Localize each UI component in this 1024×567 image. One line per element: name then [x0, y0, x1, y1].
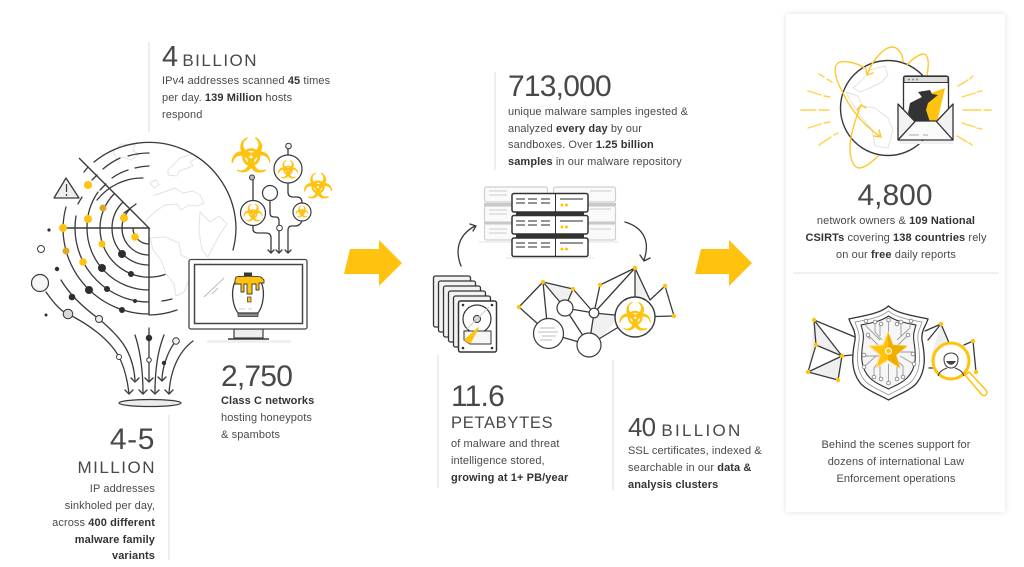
- stat: 11.6 petabytes: growing at 1+ PB/year: [451, 472, 569, 484]
- stat: 4,800 network owners: 4,800: [857, 179, 933, 212]
- text: law enforcement support: Behind the scenes support for: [821, 439, 971, 451]
- orbit arrows: [835, 47, 928, 168]
- stat: 40 billion SSL certificates: 40 BILLION: [628, 412, 743, 442]
- stat: 4 billion IPv4 addresses: [149, 41, 331, 132]
- stat: 40 billion SSL certificates: analysis clusters: [628, 479, 718, 491]
- icon: biohazard right: ☣: [303, 167, 333, 207]
- stat: 2,750 class C networks: 2,750: [221, 360, 292, 393]
- icon: magnifier with hacker: [933, 343, 987, 396]
- stat: 713,000 malware samples: unique malware samples ingested &: [508, 106, 689, 118]
- stat: 40 billion SSL certificates: SSL certificates, indexed &: [628, 445, 762, 457]
- stat: 11.6 petabytes: [438, 355, 569, 488]
- stat: 4 billion IPv4 addresses: 4 BILLION: [162, 41, 258, 73]
- stat: 4-5 million IP addresses: MILLION: [77, 458, 156, 477]
- envelope with logo window: [898, 76, 953, 144]
- arrow: first yellow arrow: [344, 240, 402, 286]
- stat: 11.6 petabytes: of malware and threat: [451, 438, 560, 450]
- illustration: biohazard network: ☣: [243, 201, 263, 227]
- shield: [849, 306, 928, 400]
- stat: 2,750 class C networks: & spambots: [221, 429, 280, 441]
- radar dots: [38, 181, 139, 316]
- icon: honey pot: [233, 272, 264, 316]
- stat: 713,000 malware samples: sandboxes. Over 1.25 billion: [508, 139, 654, 151]
- stat: 713,000 malware samples: samples in our malware repository: [508, 156, 682, 168]
- circuit lines: [862, 318, 916, 385]
- icon: biohazard large: ☣: [230, 129, 272, 184]
- arrow: servers to network: [625, 222, 650, 261]
- illustration: biohazard network: [230, 129, 333, 253]
- warning triangle icon: [54, 178, 79, 198]
- stat: 4,800 network owners: on our free daily reports: [836, 249, 956, 261]
- panel: outcomes card: [786, 14, 1005, 512]
- map on globe: [846, 66, 893, 148]
- stat: 4-5 million IP addresses: [52, 415, 169, 562]
- stat: 4-5 million IP addresses: 4-5: [110, 423, 155, 456]
- stat: 713,000 malware samples: 713,000: [508, 70, 611, 103]
- stat: 713,000 malware samples: [495, 70, 689, 170]
- stat: 4-5 million IP addresses: malware family: [75, 534, 156, 546]
- stat: 2,750 class C networks: Class C networks: [221, 395, 314, 407]
- radar wedge: [63, 158, 149, 314]
- icon: eagle logo: [908, 88, 945, 122]
- world map outline: [113, 144, 227, 296]
- stat: 4-5 million IP addresses: across 400 different: [52, 517, 155, 529]
- text: law enforcement support: Enforcement operations: [836, 473, 956, 485]
- stat: 40 billion SSL certificates: [613, 360, 762, 491]
- stat: 4,800 network owners: [805, 179, 987, 261]
- illustration: law enforcement badge: [806, 306, 987, 400]
- icon: biohazard in circles: ☣: [277, 156, 299, 184]
- icon: star: [869, 332, 907, 368]
- arrow: drive to servers: [458, 224, 476, 266]
- illustration: biohazard network: ☣: [295, 203, 309, 221]
- left network: [806, 318, 855, 382]
- stat: 4 billion IPv4 addresses: per day. 139 Million hosts: [162, 92, 293, 104]
- illustration: hard drive stack: [434, 276, 496, 352]
- stat: 4,800 network owners: network owners & 109 National: [817, 215, 975, 227]
- stat: 713,000 malware samples: analyzed every day by our: [508, 123, 642, 135]
- stat: 11.6 petabytes: 11.6: [451, 380, 504, 413]
- stat: 4 billion IPv4 addresses: respond: [162, 109, 202, 121]
- text: law enforcement support: dozens of international Law: [828, 456, 964, 468]
- illustration: honeypot monitor: [189, 260, 307, 343]
- right network: [925, 322, 978, 374]
- light rays: [801, 74, 991, 145]
- illustration: globe and envelope reports: [801, 47, 991, 168]
- text: law enforcement support: [821, 439, 971, 485]
- concentric arcs: [63, 228, 165, 314]
- stat: 40 billion SSL certificates: searchable in our data &: [628, 462, 751, 474]
- outer arc: [94, 142, 236, 250]
- stat: 4-5 million IP addresses: sinkholed per day,: [65, 500, 155, 512]
- illustration: radar globe: [32, 142, 236, 406]
- stat: 4-5 million IP addresses: variants: [112, 550, 155, 562]
- icon: biohazard node: ☣: [618, 295, 652, 339]
- stat: 11.6 petabytes: intelligence stored,: [451, 455, 545, 467]
- illustration: malware network graph: [517, 266, 676, 357]
- stat: 2,750 class C networks: hosting honeypots: [221, 412, 312, 424]
- illustration: server stack: [479, 187, 619, 259]
- arrow: second yellow arrow: [695, 240, 752, 286]
- stat: 4 billion IPv4 addresses: IPv4 addresses scanned 45 times: [162, 75, 331, 87]
- stat: 11.6 petabytes: PETABYTES: [451, 414, 553, 432]
- flow lines into sinkhole: [32, 274, 193, 394]
- sinkhole ellipse: [119, 400, 181, 406]
- stat: 4-5 million IP addresses: IP addresses: [90, 483, 155, 495]
- stat: 2,750 class C networks: [221, 360, 314, 441]
- stat: 4,800 network owners: CSIRTs covering 138 countries rely: [805, 232, 987, 244]
